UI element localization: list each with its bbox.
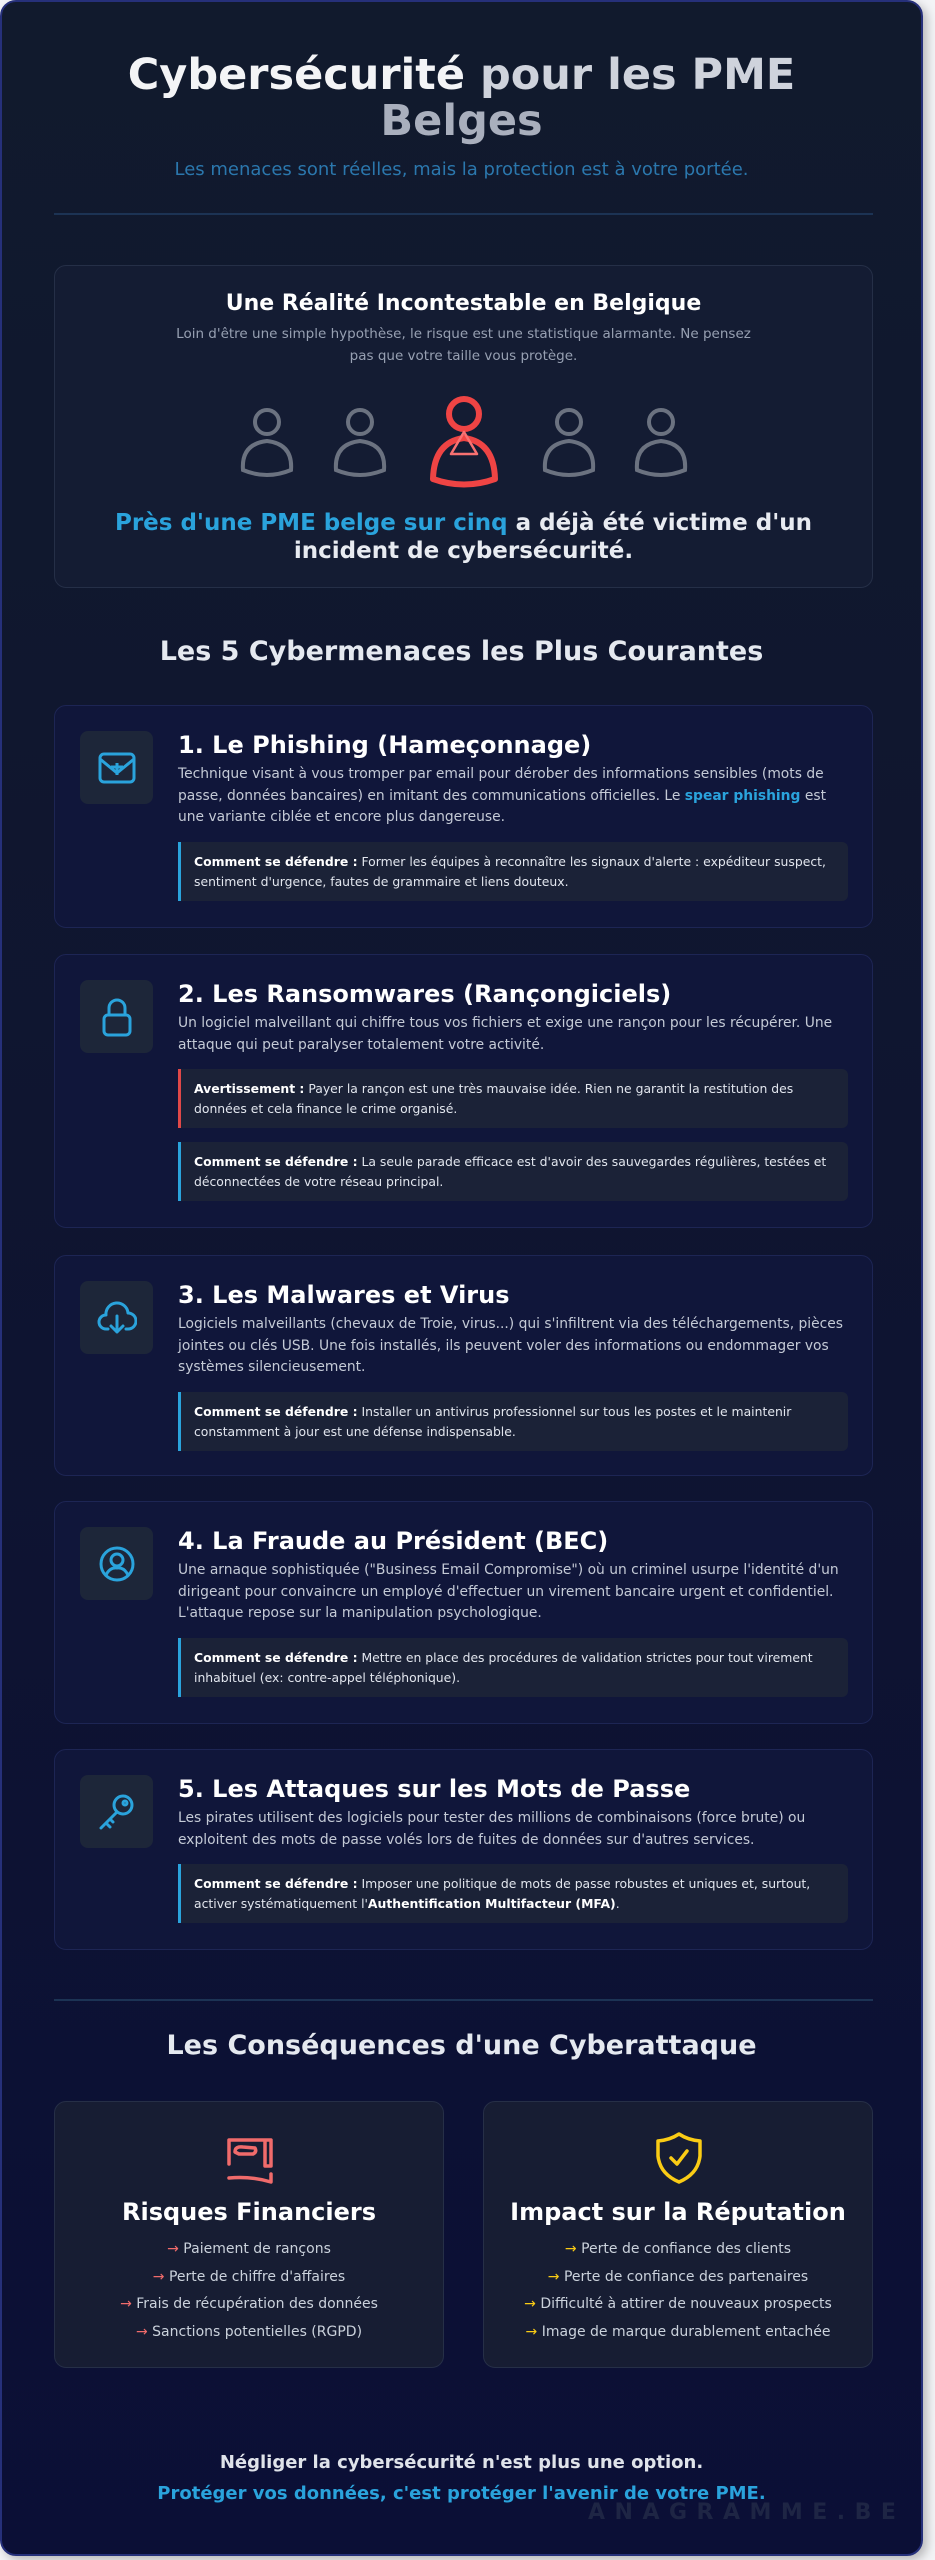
stat text: Près d'une PME belge sur cinq a déjà été victime d'un incident de cybersécurité. <box>115 510 812 564</box>
callout: defense <box>178 1392 848 1451</box>
title: Risques Financiers <box>122 2198 376 2226</box>
callout: defense: Comment se défendre : Mettre en place des procédures de validation strictes pour tout virement inhabituel (ex: contre-appel téléphonique). <box>194 1650 813 1685</box>
panel: ransomware: Un logiciel malveillant qui chiffre tous vos fichiers et exige une rançon pour les récupérer. Une attaque qui peut paralyser totalement votre activité. <box>178 1015 832 1053</box>
title: Cybersécurité pour les PME <box>128 50 795 100</box>
list <box>120 2241 378 2340</box>
list: → Sanctions potentielles (RGPD) <box>136 2324 362 2340</box>
footer message: Protéger vos données, c'est protéger l'avenir de votre PME. <box>157 2483 766 2504</box>
panel: malware <box>54 1255 873 1476</box>
footer message <box>157 2452 766 2504</box>
icon: user circle <box>80 1527 153 1600</box>
panel: CEO fraud: 4. La Fraude au Président (BEC) <box>178 1527 608 1555</box>
panel: financial risks <box>54 2101 444 2368</box>
panel: passwords: 5. Les Attaques sur les Mots de Passe <box>178 1775 690 1803</box>
callout: defense: Comment se défendre : Imposer une politique de mots de passe robustes et uniques et, surtout, activer systématiquement l'Authentification Multifacteur (MFA). <box>194 1876 810 1911</box>
panel: passwords: Les pirates utilisent des logiciels pour tester des millions de combinaisons (force brute) ou exploitent des mots de passe volés lors de fuites de données sur d'autres services. <box>178 1810 805 1848</box>
heading: consequences: Les Conséquences d'une Cyberattaque <box>166 2030 757 2061</box>
footer message: Négliger la cybersécurité n'est plus une option. <box>220 2452 703 2473</box>
icon row: people <box>240 396 688 488</box>
callout: warning: Avertissement : Payer la rançon est une très mauvaise idée. Rien ne garantit la restitution des données et cela finance le crime organisé. <box>194 1081 793 1116</box>
reality text: Loin d'être une simple hypothèse, le risque est une statistique alarmante. Ne pensez pas que votre taille vous protège. <box>176 326 751 364</box>
icon: envelope <box>80 731 153 804</box>
title: Belges <box>380 96 543 146</box>
callout: defense <box>178 1142 848 1201</box>
watermark: ANAGRAMME.BE <box>588 2500 905 2525</box>
heading: threats: Les 5 Cybermenaces les Plus Courantes <box>160 636 763 667</box>
panel: reputation <box>483 2101 873 2368</box>
panel: phishing: 1. Le Phishing (Hameçonnage) <box>178 731 591 759</box>
title: Impact sur la Réputation <box>510 2198 846 2226</box>
panel: phishing <box>54 705 873 928</box>
icon: money <box>227 2138 273 2184</box>
panel: ransomware <box>54 954 873 1228</box>
panel: ransomware: 2. Les Ransomwares (Rançongiciels) <box>178 980 671 1008</box>
icon: cloud download <box>80 1281 153 1354</box>
panel: CEO fraud: Une arnaque sophistiquée ("Business Email Compromise") où un criminel usurpe l'identité d'un dirigeant pour convaincre un employé d'effectuer un virement bancaire urgent et confidentiel. L'attaque repose sur la manipulation psychologique. <box>178 1562 839 1621</box>
list: → Perte de chiffre d'affaires <box>153 2269 345 2285</box>
callout: defense: Comment se défendre : La seule parade efficace est d'avoir des sauvegardes régulières, testées et déconnectées de votre réseau principal. <box>194 1154 826 1189</box>
reality heading: Une Réalité Incontestable en Belgique <box>226 291 701 316</box>
panel: CEO fraud <box>54 1501 873 1724</box>
callout: warning <box>178 1069 848 1128</box>
callout: defense: Comment se défendre : Former les équipes à reconnaître les signaux d'alerte : expéditeur suspect, sentiment d'urgence, fautes de grammaire et liens douteux. <box>194 854 826 889</box>
panel: phishing: Technique visant à vous tromper par email pour dérober des informations sensibles (mots de passe, données bancaires) en imitant des communications officielles. Le spear phishing est une variante ciblée et encore plus dangereuse. <box>178 766 826 825</box>
callout: defense <box>178 1864 848 1923</box>
panel: passwords <box>54 1749 873 1950</box>
icon: shield check <box>656 2132 702 2184</box>
panel: malware: 3. Les Malwares et Virus <box>178 1281 510 1309</box>
subtitle: Les menaces sont réelles, mais la protection est à votre portée. <box>174 159 748 180</box>
callout: defense <box>178 1638 848 1697</box>
callout: defense: Comment se défendre : Installer un antivirus professionnel sur tous les postes et le maintenir constamment à jour est une défense indispensable. <box>194 1404 791 1439</box>
list <box>524 2241 832 2340</box>
callout: defense <box>178 842 848 901</box>
title <box>128 50 795 146</box>
list: → Paiement de rançons <box>167 2241 331 2257</box>
list: → Difficulté à attirer de nouveaux prospects <box>524 2296 832 2312</box>
list: → Perte de confiance des clients <box>565 2241 791 2257</box>
list: → Perte de confiance des partenaires <box>548 2269 808 2285</box>
icon: lock <box>80 980 153 1053</box>
list: → Frais de récupération des données <box>120 2296 378 2312</box>
panel: malware: Logiciels malveillants (chevaux de Troie, virus...) qui s'infiltrent via des téléchargements, pièces jointes ou clés USB. Une fois installés, ils peuvent voler des informations ou endommager vos systèmes silencieusement. <box>178 1316 843 1375</box>
icon: key <box>80 1775 153 1848</box>
panel: reality <box>54 265 873 588</box>
list: → Image de marque durablement entachée <box>526 2324 830 2340</box>
